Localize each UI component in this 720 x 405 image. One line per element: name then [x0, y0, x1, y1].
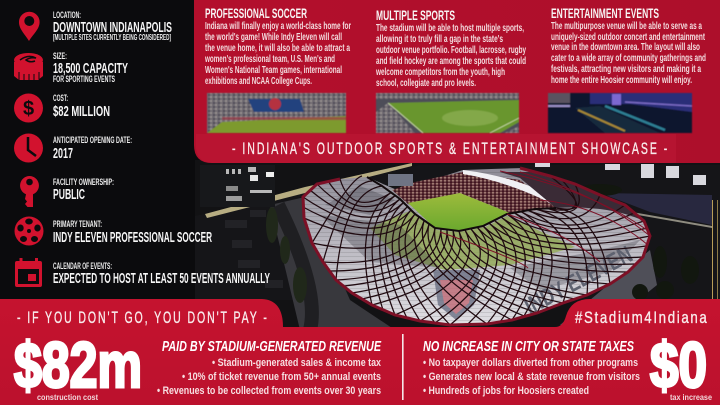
cost fact [53, 93, 110, 120]
text: multiple sports: and field hockey are among the sports that could [376, 56, 526, 67]
tenant fact: INDY ELEVEN PROFESSIONAL SOCCER [53, 230, 212, 246]
text: professional soccer: Indiana will finally enjoy a world-class home for [205, 21, 351, 32]
heading: multiple sports: MULTIPLE SPORTS [376, 7, 455, 23]
text: professional soccer: Women's National Team games, international [205, 65, 342, 76]
ownership fact [53, 177, 114, 203]
panel: bottom red funding [0, 299, 720, 405]
translucent roof over pitch [370, 210, 575, 270]
tenant fact: PRIMARY TENANT: [53, 219, 102, 229]
location fact: [MULTIPLE SITES CURRENTLY BEING CONSIDERED] [53, 33, 171, 42]
team crest on roof [433, 270, 480, 320]
events fact: CALENDAR OF EVENTS: [53, 261, 112, 271]
cost fact: COST: [53, 93, 68, 103]
roof shadows [320, 186, 640, 290]
opening date fact [53, 135, 132, 162]
size fact: SIZE: [53, 51, 67, 61]
roof lettering: INDY ELEVEN [520, 241, 637, 320]
icon: key [20, 176, 39, 207]
icon: soccer ball [14, 216, 44, 246]
big number: 82m: $82m [14, 329, 142, 401]
upper right roof dark [500, 172, 644, 221]
text: multiple sports: The stadium will be able to host multiple sports, [376, 23, 524, 34]
size fact: FOR SPORTING EVENTS [53, 74, 115, 84]
text: multiple sports: school, collegiate and pro levels. [376, 78, 476, 89]
text: professional soccer: women's professional team, U.S. Men's and [204, 54, 335, 65]
cost fact: $82 MILLION [53, 104, 110, 120]
text: multiple sports [375, 23, 526, 89]
heading: professional soccer: PROFESSIONAL SOCCER [205, 5, 307, 21]
icon: location pin [19, 12, 40, 41]
ownership fact: PUBLIC [53, 187, 85, 203]
stadium scene [195, 160, 720, 330]
list: revenue: • Revenues to be collected from events over 30 years [157, 385, 381, 397]
stadium outer rim [303, 168, 650, 325]
text: multiple sports: welcome competitors from the youth, high [375, 67, 505, 78]
banner background [196, 134, 676, 163]
banner heading: - INDIANA'S OUTDOOR SPORTS & ENTERTAINMENT SHOWCASE - [232, 138, 667, 158]
text: entertainment events [551, 21, 706, 86]
text: multiple sports: outdoor venue portfolio. Football, lacrosse, rugby [376, 45, 526, 56]
icon: calendar [15, 258, 42, 287]
scoreboard [388, 174, 413, 186]
text: professional soccer: exhibitions and NCAA College Cups. [205, 76, 312, 87]
panel: left facts column [0, 0, 270, 300]
list: taxes: • Hundreds of jobs for Hoosiers created [423, 385, 589, 397]
text: professional soccer [204, 21, 351, 87]
size fact [53, 51, 128, 84]
heading: taxes: NO INCREASE IN CITY OR STATE TAXES [423, 339, 634, 355]
city surroundings [195, 160, 720, 330]
photo: field [376, 93, 519, 133]
size fact: 18,500 CAPACITY [53, 61, 128, 77]
photo: concert [548, 93, 692, 133]
field [408, 193, 510, 231]
list: revenue: • 10% of ticket revenue from 50+ annual events [182, 371, 381, 383]
opening date fact: 2017 [53, 146, 73, 162]
list: taxes: • Generates new local & state revenue from visitors [423, 371, 640, 383]
location fact: LOCATION: [53, 10, 81, 20]
opening date fact: ANTICIPATED OPENING DATE: [53, 135, 132, 145]
ownership fact: FACILITY OWNERSHIP: [53, 177, 114, 187]
list: revenue [157, 357, 382, 397]
text: multiple sports: allowing it to truly fill a gap in the state's [376, 34, 503, 45]
roof lights [463, 170, 557, 207]
roof lattice [303, 176, 650, 325]
icon: dollar coin [14, 94, 43, 122]
right roof bands [440, 171, 650, 268]
hashtag: #Stadium4Indiana [575, 309, 707, 327]
stadium roof [303, 168, 650, 325]
icon: tape measure [14, 53, 43, 81]
roof inner edge [367, 177, 556, 231]
tenant fact [53, 219, 212, 246]
events fact [53, 261, 270, 287]
text: professional soccer: the venue home, it will also be able to attract a [205, 43, 350, 54]
events fact: EXPECTED TO HOST AT LEAST 50 EVENTS ANNUALLY [53, 271, 270, 287]
seating bowl [392, 172, 557, 213]
icon: clock [14, 134, 43, 162]
list: revenue: • Stadium-generated sales & income tax [212, 357, 382, 369]
location fact: DOWNTOWN INDIANAPOLIS [53, 20, 172, 36]
icon: dollar coin: $ [23, 98, 34, 120]
caption: construction cost: construction cost [37, 392, 98, 402]
location fact [53, 10, 172, 42]
list: taxes [423, 357, 640, 397]
photo: soccer crowd [207, 93, 346, 133]
caption: tax increase: tax increase [670, 392, 712, 402]
big number: 0: $0 [650, 329, 707, 401]
slogan: - IF YOU DON'T GO, YOU DON'T PAY - [17, 307, 267, 327]
list: taxes: • No taxpayer dollars diverted from other programs [423, 357, 638, 369]
panel: top red features [194, 0, 720, 163]
heading: revenue: PAID BY STADIUM-GENERATED REVENUE [162, 339, 382, 355]
text: professional soccer: the world's game! While Indy Eleven will call [205, 32, 342, 43]
